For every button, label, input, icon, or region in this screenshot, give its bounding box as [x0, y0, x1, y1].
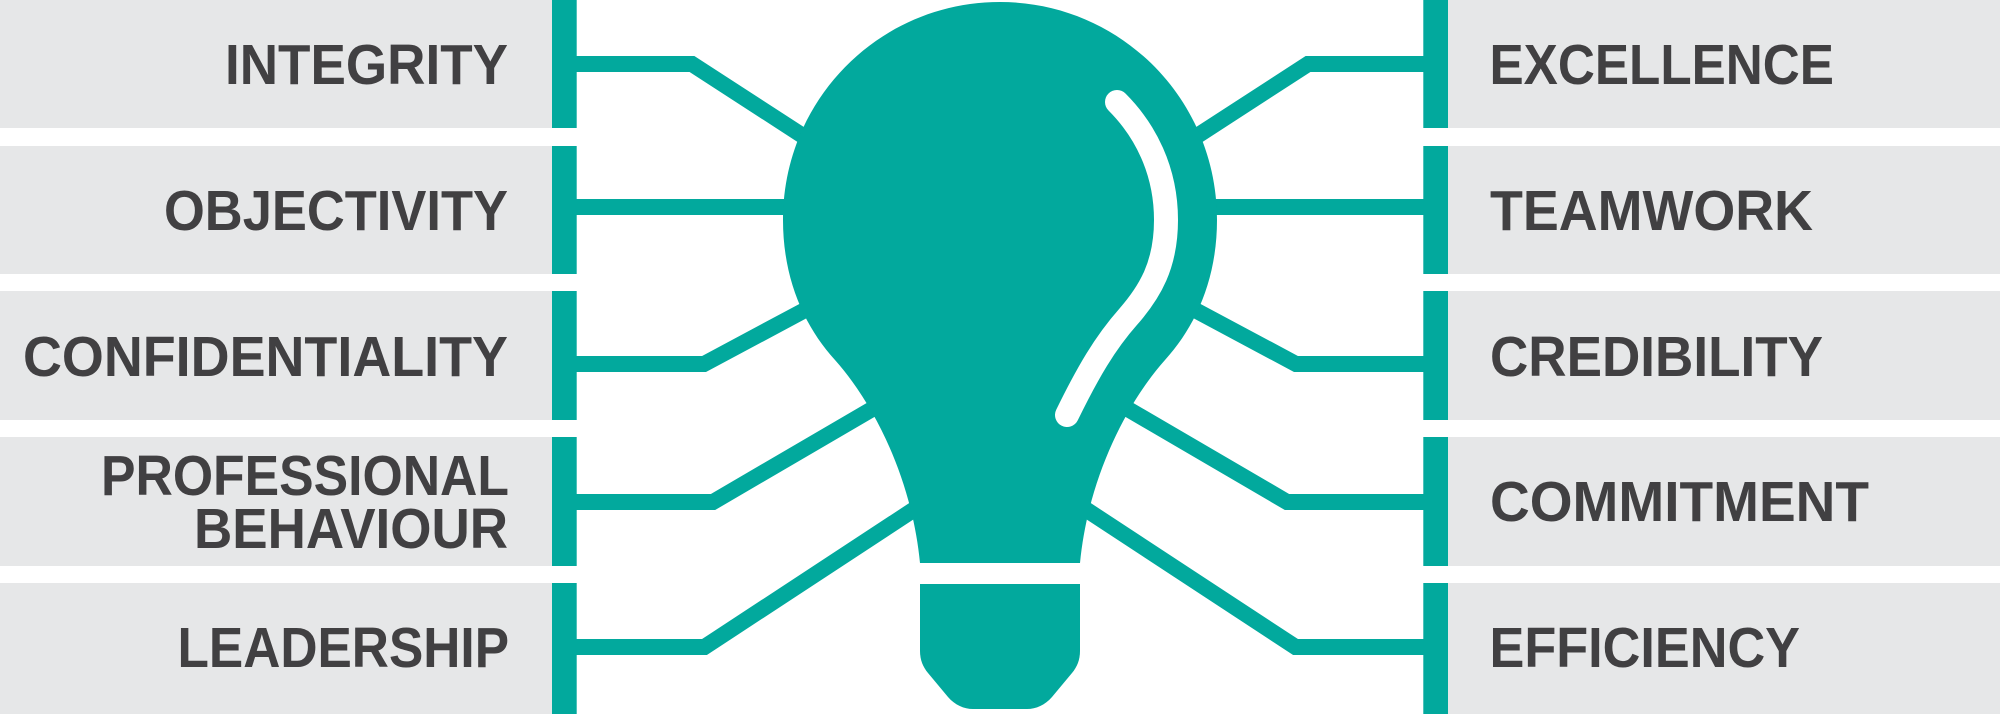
panel: professional behaviour	[0, 437, 577, 566]
panel: integrity	[0, 0, 577, 128]
panel: confidentiality	[0, 291, 577, 420]
panel: teamwork	[1423, 146, 2000, 274]
panel: confidentiality: CONFIDENTIALITY	[23, 325, 508, 389]
connector lines from panels to bulb	[576, 64, 1424, 647]
panel: excellence	[1423, 0, 2000, 128]
bulb glass	[783, 2, 1217, 563]
icon: lightbulb	[783, 2, 1217, 709]
panel: credibility: CREDIBILITY	[1490, 325, 1823, 389]
panel: efficiency: EFFICIENCY	[1490, 616, 1800, 680]
panel: credibility	[1423, 291, 2000, 420]
panel: professional behaviour: BEHAVIOUR	[194, 497, 508, 561]
bulb highlight	[1067, 102, 1166, 415]
panel: commitment	[1423, 437, 2000, 566]
panel: leadership: LEADERSHIP	[178, 616, 509, 680]
panel: commitment: COMMITMENT	[1490, 470, 1869, 534]
panel: objectivity	[0, 146, 577, 274]
left column of values	[0, 0, 577, 714]
bulb base	[920, 584, 1080, 709]
panel: efficiency	[1423, 583, 2000, 714]
panel: objectivity: OBJECTIVITY	[164, 179, 508, 243]
panel: leadership	[0, 583, 577, 714]
panel: professional behaviour: PROFESSIONAL	[101, 444, 509, 508]
panel: teamwork: TEAMWORK	[1490, 179, 1813, 243]
panel: excellence: EXCELLENCE	[1490, 33, 1834, 97]
right column of values	[1423, 0, 2000, 714]
panel: integrity: INTEGRITY	[225, 33, 508, 97]
